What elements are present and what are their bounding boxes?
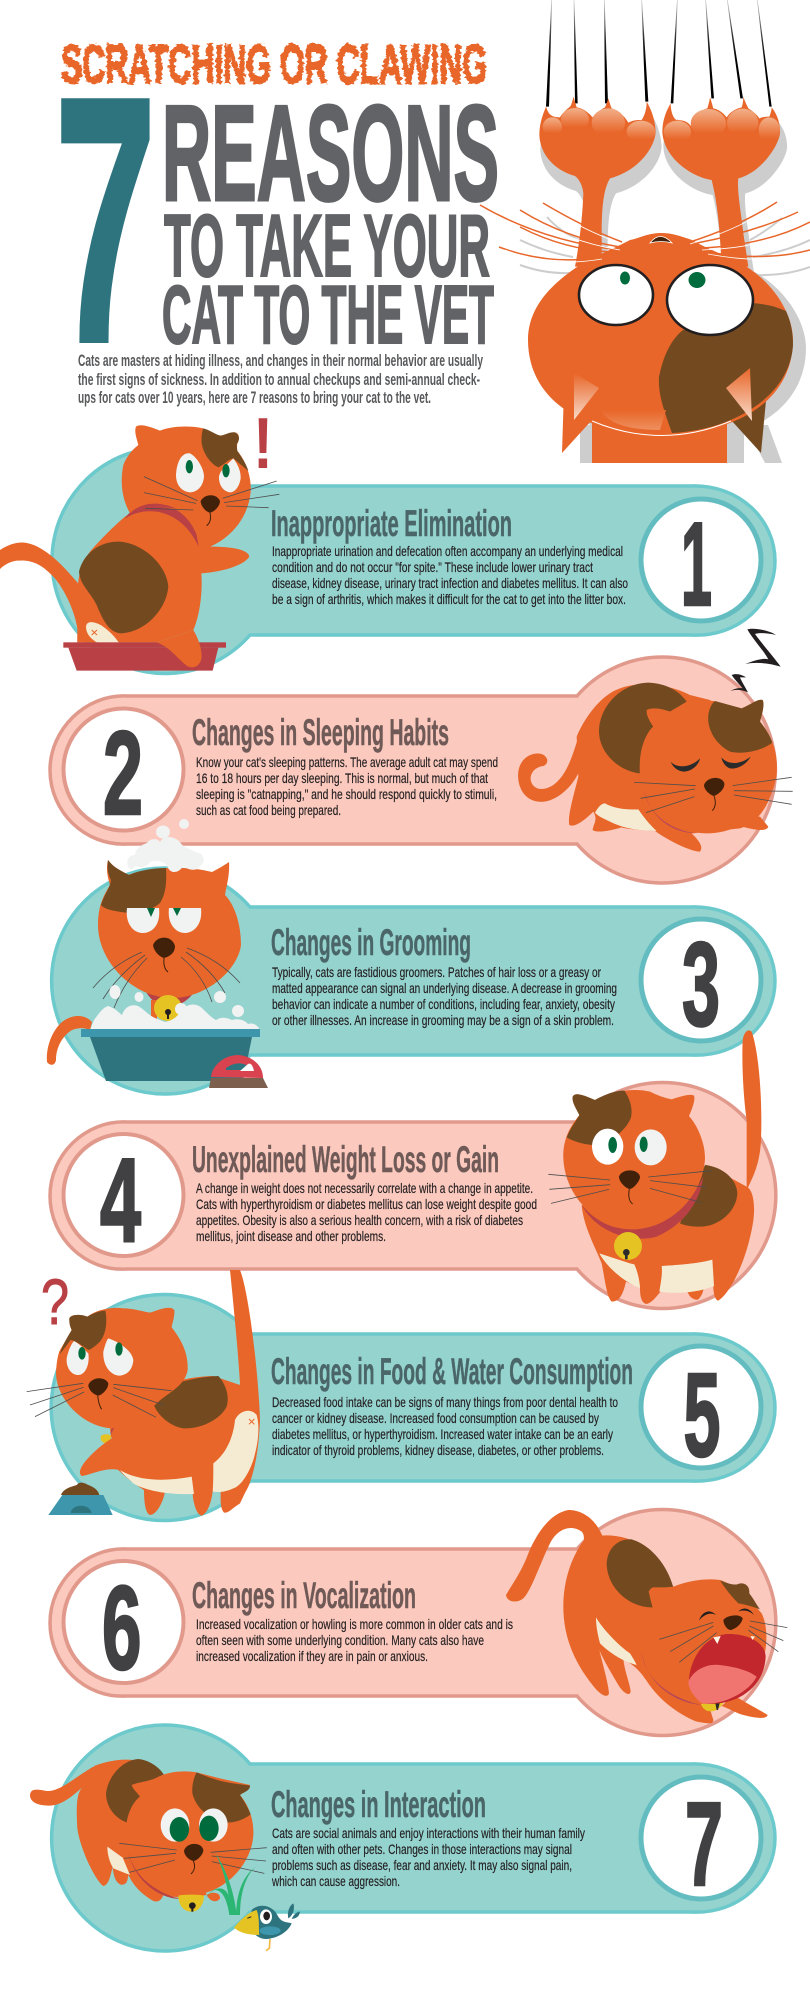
number badge: 7 (685, 1778, 723, 1911)
number badge: 6 (102, 1562, 142, 1695)
band (50, 1082, 776, 1308)
litter box (63, 642, 226, 671)
body text: mellitus, joint disease and other problems. (196, 1228, 386, 1244)
body text: Decreased food intake can be signs of many things from poor dental health to (272, 1394, 618, 1410)
number badge (64, 1134, 184, 1267)
head patch (720, 1580, 760, 1609)
bell (701, 1701, 724, 1711)
eyes (161, 1808, 228, 1842)
grey whisker shadows (520, 217, 810, 275)
tail (0, 542, 100, 642)
intro text (78, 351, 483, 407)
nose (723, 1615, 743, 1630)
panel 5: food and water (27, 1266, 775, 1520)
body text: diabetes mellitus, or hyperthyroidism. Increased water intake can be an early (272, 1426, 613, 1442)
body spot (106, 1759, 165, 1822)
z letters (731, 629, 781, 692)
number badge (641, 1777, 761, 1911)
panel 6: vocalization (50, 1510, 787, 1736)
belly (595, 803, 657, 831)
head patch (202, 428, 248, 471)
collar front (125, 504, 177, 519)
nose (619, 1170, 640, 1189)
band (52, 448, 775, 674)
body and legs (563, 1535, 713, 1723)
nose (88, 1378, 108, 1396)
eyes (127, 908, 201, 933)
number badge: 2 (103, 707, 143, 840)
head (127, 1771, 253, 1895)
body text: indicator of thyroid problems, kidney disease, diabetes, or other problems. (272, 1442, 604, 1458)
eyes (592, 1129, 667, 1165)
paw (722, 1695, 768, 1718)
nose (184, 1844, 203, 1861)
head (640, 700, 777, 833)
number badge (641, 918, 761, 1051)
body text: A change in weight does not necessarily correlate with a change in appetite. (196, 1180, 533, 1196)
body text: problems such as disease, fear and anxiety. It may also signal pain, (272, 1857, 572, 1873)
number badge: 5 (684, 1349, 720, 1482)
eyes (67, 1338, 133, 1376)
nose (704, 778, 724, 796)
closed eyes (699, 1608, 754, 1621)
body and ears (562, 390, 767, 463)
head (56, 1308, 188, 1428)
chin line (592, 421, 731, 436)
basin (81, 1029, 260, 1081)
body (569, 684, 775, 852)
chin highlight (600, 410, 666, 430)
tail (221, 1270, 260, 1513)
panel 1: inappropriate elimination (0, 404, 775, 674)
body text: Cats are social animals and enjoy interactions with their human family (272, 1825, 585, 1841)
food bowl (48, 1483, 113, 1515)
panel 4: weight (50, 1030, 776, 1308)
body text: Inappropriate urination and defecation often accompany an underlying medical (272, 543, 623, 559)
nose (201, 495, 220, 513)
big numeral 7: 7 (55, 26, 156, 414)
body spot (79, 542, 168, 633)
intro text: the first signs of sickness. In addition to annual checkups and semi-annual check- (78, 370, 480, 389)
body (77, 1760, 207, 1901)
head (122, 425, 251, 547)
body text: cancer or kidney disease. Increased food consumption can be caused by (272, 1410, 599, 1426)
bird (234, 1903, 300, 1951)
body text (271, 1825, 585, 1889)
intro text: Cats are masters at hiding illness, and changes in their normal behavior are usually (78, 351, 483, 370)
illustration: scratching cat (480, 0, 810, 463)
head patch (192, 1772, 251, 1823)
head (563, 1090, 705, 1228)
eyes (579, 265, 753, 335)
body text (196, 1616, 513, 1664)
band (51, 1294, 775, 1520)
cat in litter box (0, 425, 279, 671)
belly (107, 1847, 130, 1875)
paw (207, 1893, 220, 1901)
heading: Changes in Grooming (271, 922, 471, 963)
hind leg (86, 622, 119, 643)
collar (642, 1652, 702, 1705)
panel 2: sleeping habits (50, 629, 793, 883)
band (52, 868, 775, 1094)
claw marks (546, 0, 772, 107)
collar (125, 503, 199, 547)
heading: Changes in Vocalization (192, 1575, 416, 1616)
body (582, 1165, 754, 1304)
body text: behavior can indicate a number of conditions, including fear, anxiety, obesity (272, 996, 615, 1012)
body spot (680, 1165, 737, 1227)
collar (145, 990, 195, 1008)
number badge: 1 (681, 498, 712, 631)
body text: often seen with some underlying condition. Many cats also have (196, 1632, 484, 1648)
whiskers (634, 777, 793, 813)
head patch (659, 303, 793, 433)
collar (644, 790, 697, 833)
nose (650, 236, 672, 243)
grass (205, 1852, 257, 1915)
sleeping cat (518, 629, 793, 852)
body text (196, 754, 498, 818)
number badge (64, 707, 184, 840)
ear highlights (574, 368, 752, 421)
body text: Know your cat's sleeping patterns. The average adult cat may spend (196, 754, 498, 770)
head patch (567, 1091, 632, 1145)
body text (272, 1394, 618, 1458)
teeth (713, 1636, 755, 1644)
number badge (641, 498, 761, 631)
whiskers (548, 1171, 712, 1203)
body text (196, 1180, 537, 1244)
body text: disease, kidney disease, urinary tract infection and diabetes mellitus. It can also (272, 575, 628, 591)
band (50, 1510, 776, 1736)
bell (154, 995, 182, 1021)
body spot (607, 1539, 673, 1607)
head (528, 233, 793, 434)
body text: or other illnesses. An increase in grooming may be a sign of a skin problem. (272, 1012, 614, 1028)
body (77, 508, 249, 642)
body text: Typically, cats are fastidious groomers. Patches of hair loss or a greasy or (272, 964, 601, 980)
body text: matted appearance can signal an underlying disease. A decrease in grooming (272, 980, 617, 996)
body text: and often with other pets. Changes in those interactions may signal (272, 1841, 572, 1857)
tail (506, 1510, 603, 1602)
exclamation mark: ! (253, 404, 273, 484)
head patch (101, 860, 166, 913)
belly (599, 1253, 714, 1293)
body (80, 1376, 259, 1516)
front leg (157, 630, 202, 667)
bell (178, 1895, 204, 1912)
foam (90, 819, 260, 1030)
confused cat with bowl (27, 1270, 260, 1516)
panel 3: grooming (47, 819, 775, 1094)
number badge (64, 1561, 184, 1695)
whiskers (659, 1621, 787, 1662)
bell (614, 1232, 642, 1260)
whiskers (119, 1843, 267, 1873)
cat in bath (47, 819, 268, 1088)
body text: be a sign of arthritis, which makes it difficult for the cat to get into the litter box. (272, 591, 626, 607)
body text: Cats with hyperthyroidism or diabetes mellitus can lose weight despite good (196, 1196, 537, 1212)
tail (518, 727, 590, 802)
body text: appetites. Obesity is also a serious health concern, with a risk of diabetes (196, 1212, 523, 1228)
collar (582, 1177, 703, 1239)
panel 7: interaction (30, 1725, 775, 1951)
question mark: ? (41, 1266, 69, 1338)
head (642, 1579, 766, 1704)
body text: sleeping is "catnapping," and he should respond quickly to stimuli, (196, 786, 497, 802)
whiskers (144, 477, 279, 510)
mouth (689, 1634, 766, 1704)
title: to take your: TO TAKE YOUR (164, 196, 490, 295)
tail (742, 1030, 761, 1190)
howling cat (506, 1510, 787, 1723)
title: scratching or clawing: SCRATCHING OR CLAWING (61, 33, 487, 95)
closed eyes (671, 757, 751, 772)
band (52, 1725, 775, 1951)
tongue (688, 1665, 757, 1704)
crouching cat, grass and bird (30, 1759, 300, 1951)
head patch (60, 1311, 106, 1354)
body text: increased vocalization if they are in pain or anxious. (196, 1648, 428, 1664)
body text (272, 543, 628, 607)
whiskers (480, 202, 810, 262)
head patch (708, 700, 772, 753)
scrub brush (209, 1055, 268, 1088)
body text: Increased vocalization or howling is more common in older cats and is (196, 1616, 513, 1632)
heading: Inappropriate Elimination (271, 503, 512, 544)
number badge: 4 (100, 1134, 141, 1267)
number badge: 3 (682, 918, 720, 1051)
belly (120, 1411, 258, 1494)
band (50, 657, 775, 883)
belly (596, 1617, 637, 1665)
standing cat (548, 1030, 761, 1304)
intro text: ups for cats over 10 years, here are 7 reasons to bring your cat to the vet. (78, 388, 431, 407)
body text: 16 to 18 hours per day sleeping. This is normal, but much of that (196, 770, 488, 786)
body text: condition and do not occur "for spite." These include lower urinary tract (272, 559, 593, 575)
collar (128, 1852, 180, 1899)
body text (272, 964, 617, 1028)
header (55, 26, 499, 414)
collar (111, 1386, 172, 1435)
paws (539, 97, 780, 267)
heading: Changes in Interaction (271, 1784, 486, 1825)
body spot (152, 1376, 228, 1428)
drop shadows (540, 112, 806, 463)
eyes (176, 453, 241, 492)
x mark (92, 630, 97, 635)
tail (30, 1767, 100, 1806)
nose (153, 938, 175, 958)
body text: such as cat food being prepared. (196, 802, 341, 818)
number badge (641, 1346, 761, 1482)
whiskers (93, 948, 240, 1008)
body text: which can cause aggression. (271, 1873, 400, 1889)
x mark (249, 1419, 254, 1424)
bell (101, 1434, 112, 1445)
head (98, 860, 241, 998)
right paw (740, 817, 768, 830)
body spot (599, 683, 687, 773)
heading: Changes in Sleeping Habits (192, 712, 449, 753)
heading: Unexplained Weight Loss or Gain (192, 1139, 499, 1180)
tail (47, 1016, 92, 1065)
whiskers (27, 1383, 172, 1417)
